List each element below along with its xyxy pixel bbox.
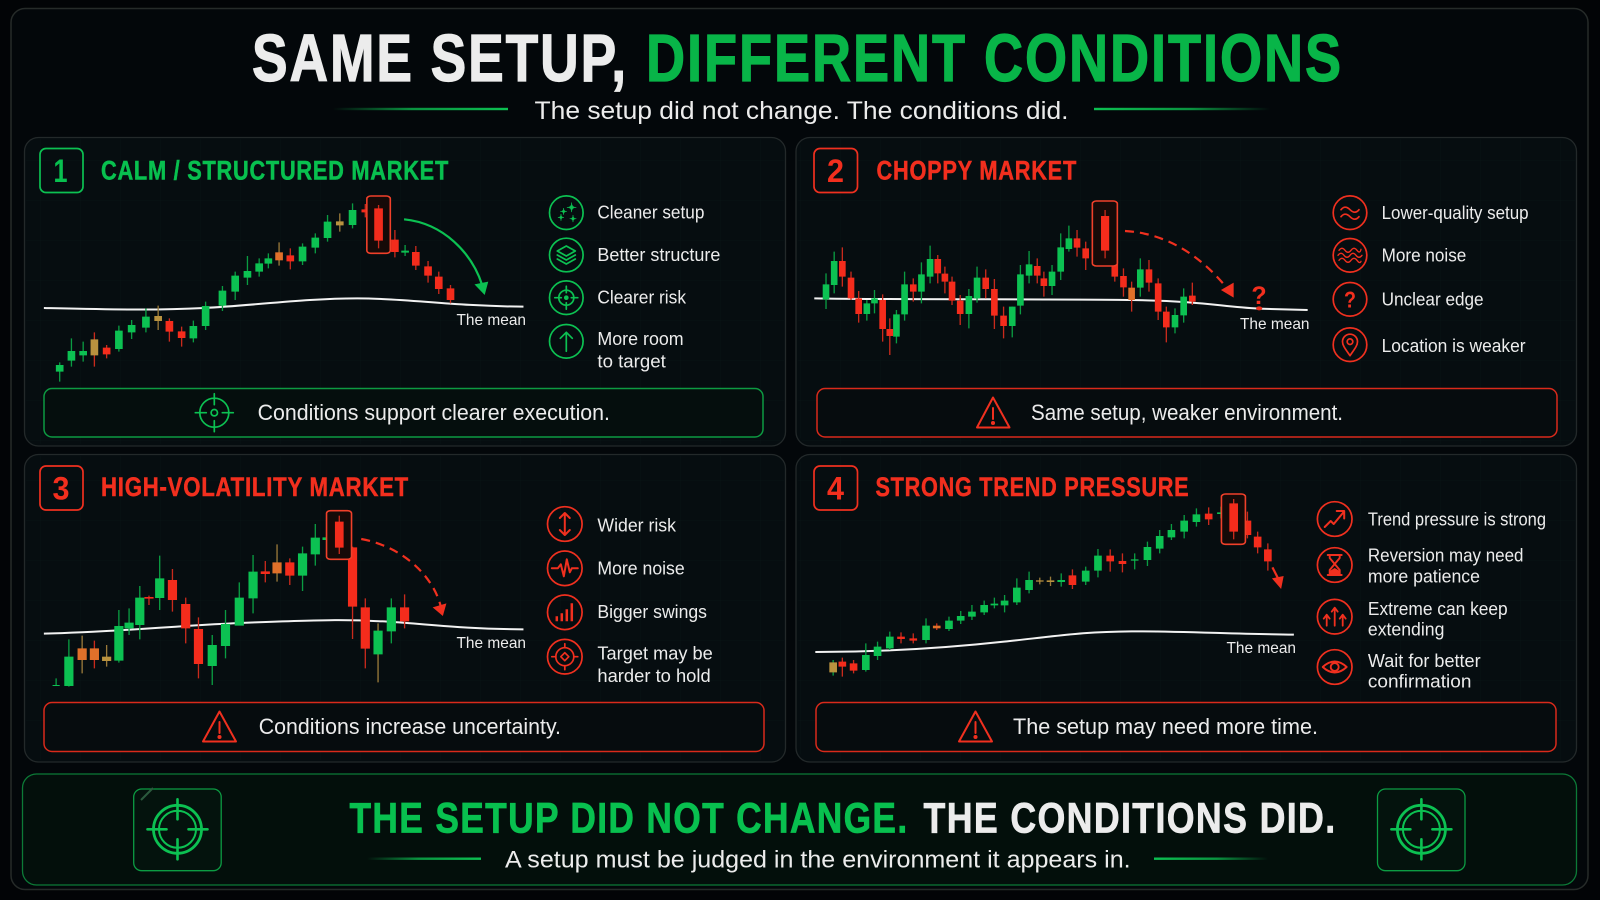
list: calm conditions: Better structure xyxy=(597,245,720,265)
list: trend conditions xyxy=(1317,502,1546,692)
candlestick chart 3 xyxy=(44,511,523,687)
number badge 2 xyxy=(814,148,858,192)
title: DIFFERENT CONDITIONS xyxy=(646,21,1343,96)
callout: same setup weaker environment xyxy=(817,388,1557,437)
heading: choppy market: CHOPPY MARKET xyxy=(876,156,1077,186)
list: calm conditions: More room xyxy=(597,329,684,349)
list: choppy conditions: Location is weaker xyxy=(1382,336,1526,356)
candlestick chart 2 xyxy=(814,201,1308,355)
icon: warning xyxy=(203,712,236,742)
panel: choppy market xyxy=(796,138,1576,446)
panel: strong trend pressure xyxy=(796,454,1576,762)
icon: noise xyxy=(1333,238,1367,272)
list: trend conditions: Extreme can keep xyxy=(1368,599,1508,619)
list: calm conditions xyxy=(550,196,720,372)
banner subtitle: A setup must be judged in the environment it appears in. xyxy=(505,847,1131,874)
banner headline: THE SETUP DID NOT CHANGE. xyxy=(350,796,908,843)
icon: target diamond xyxy=(548,639,582,674)
panel: high-volatility market xyxy=(24,454,786,762)
banner headline: THE CONDITIONS DID. xyxy=(924,796,1336,843)
label: the mean: The mean xyxy=(456,635,526,652)
icon: waves xyxy=(1333,196,1367,230)
icon: layers xyxy=(550,238,583,272)
callout: conditions support clearer execution: Conditions support clearer execution. xyxy=(258,400,610,425)
number badge 3 xyxy=(40,466,83,510)
list: volatility conditions: Wider risk xyxy=(597,516,677,536)
icon: trend arrow xyxy=(1317,502,1352,536)
label: the mean: The mean xyxy=(1240,316,1310,333)
icon: target xyxy=(550,281,583,314)
list: volatility conditions: Target may be xyxy=(597,643,713,663)
icon: crosshair xyxy=(195,394,233,432)
list: trend conditions: extending xyxy=(1368,620,1444,640)
label: the mean: The mean xyxy=(1226,640,1296,657)
icon: question: ? xyxy=(1344,286,1356,312)
list: volatility conditions xyxy=(548,507,713,686)
list: volatility conditions: Bigger swings xyxy=(597,602,707,622)
icon: pulse xyxy=(548,551,582,586)
banner headline xyxy=(350,796,1336,843)
heading: calm structured market: CALM / STRUCTURED MARKET xyxy=(101,156,449,186)
candlestick chart 4 xyxy=(815,494,1294,677)
icon: left target badge xyxy=(134,788,221,871)
candlestick chart 1 xyxy=(44,196,523,382)
callout: conditions increase uncertainty xyxy=(44,702,764,752)
list: trend conditions: more patience xyxy=(1368,566,1480,586)
number badge 4: 4 xyxy=(827,470,844,506)
icon: hourglass xyxy=(1317,548,1352,582)
panel: calm structured market xyxy=(24,138,786,446)
number badge 4 xyxy=(814,466,858,510)
callout: the setup may need more time: The setup may need more time. xyxy=(1013,714,1318,739)
icon: rising arrows xyxy=(1317,599,1352,634)
list: calm conditions: to target xyxy=(597,352,666,372)
list: calm conditions: Clearer risk xyxy=(597,288,687,308)
list: calm conditions: Cleaner setup xyxy=(597,202,704,222)
icon: question xyxy=(1333,282,1367,316)
callout: conditions support clearer execution xyxy=(44,388,763,437)
question mark: ? xyxy=(1251,282,1267,310)
icon: warning xyxy=(959,712,992,742)
heading: high-volatility market: HIGH-VOLATILITY MARKET xyxy=(101,472,409,502)
panel: bottom takeaway banner xyxy=(22,774,1576,885)
list: choppy conditions xyxy=(1333,196,1529,362)
icon: sparkles xyxy=(550,196,583,230)
heading: strong trend pressure: STRONG TREND PRESSURE xyxy=(876,472,1189,502)
number badge 3: 3 xyxy=(52,470,70,506)
list: choppy conditions: Lower-quality setup xyxy=(1382,203,1529,223)
list: choppy conditions: Unclear edge xyxy=(1382,289,1484,309)
list: volatility conditions: More noise xyxy=(597,558,685,578)
list: trend conditions: Trend pressure is strong xyxy=(1368,510,1546,530)
label: the mean: The mean xyxy=(456,312,526,329)
icon: bars xyxy=(548,595,582,630)
subtitle: The setup did not change. The conditions did. xyxy=(534,97,1068,125)
number badge 1 xyxy=(40,148,83,192)
title xyxy=(252,21,1343,96)
title: SAME SETUP, xyxy=(252,21,628,96)
icon: right target badge xyxy=(1378,789,1465,871)
callout: same setup weaker environment: Same setup, weaker environment. xyxy=(1031,400,1343,425)
icon: eye xyxy=(1317,650,1352,684)
callout: the setup may need more time xyxy=(816,702,1556,752)
number badge 1: 1 xyxy=(54,153,68,189)
list: trend conditions: confirmation xyxy=(1368,672,1471,692)
list: volatility conditions: harder to hold xyxy=(597,666,711,686)
list: trend conditions: Reversion may need xyxy=(1368,546,1524,566)
number badge 2: 2 xyxy=(827,153,844,189)
icon: warning xyxy=(977,398,1010,428)
list: trend conditions: Wait for better xyxy=(1368,651,1481,671)
list: choppy conditions: More noise xyxy=(1382,246,1466,266)
icon: up arrow xyxy=(550,324,583,358)
icon: wide range xyxy=(548,507,582,541)
callout: conditions increase uncertainty: Conditions increase uncertainty. xyxy=(259,714,561,739)
icon: location pin xyxy=(1333,328,1367,362)
